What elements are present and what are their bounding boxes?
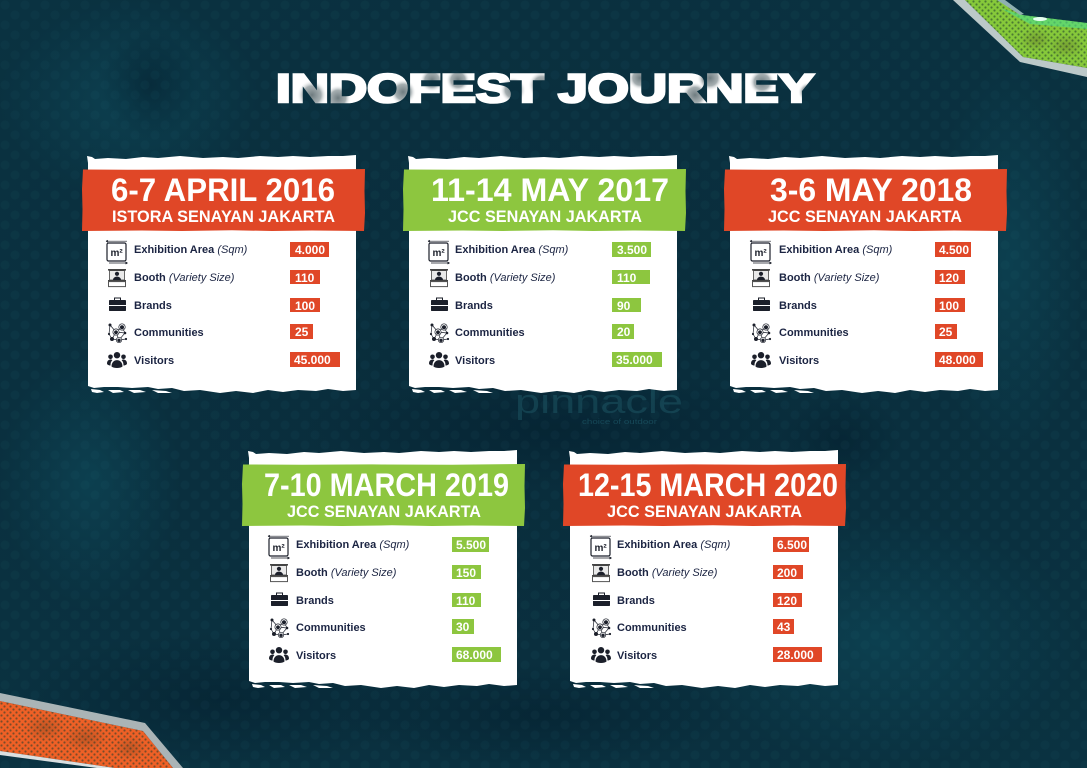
values: 25: [295, 325, 309, 339]
icon: booth: [430, 269, 448, 287]
row labels: Communities: [779, 327, 849, 339]
banner: 2019: JCC SENAYAN JAKARTA: [287, 503, 481, 521]
banner: 2020: JCC SENAYAN JAKARTA: [607, 503, 802, 521]
banner: 2016: ISTORA SENAYAN JAKARTA: [112, 208, 335, 226]
icon: area: m²: [110, 248, 123, 259]
values: 110: [617, 271, 637, 285]
icon: brands: [753, 298, 770, 311]
values: 6.500: [777, 538, 807, 552]
row labels: Brands: [779, 300, 817, 312]
row labels: Exhibition Area (Sqm): [134, 244, 248, 256]
row labels: Communities: [296, 622, 366, 634]
row labels: Brands: [134, 300, 172, 312]
icon: communities: [270, 618, 289, 638]
icon: brands: [431, 298, 448, 311]
banner: 2019: 7-10 MARCH 2019: [264, 467, 509, 503]
values: 68.000: [456, 648, 493, 662]
banner: 2019: [242, 464, 525, 526]
icon: area: [106, 240, 128, 264]
banner: 2017: 11-14 MAY 2017: [431, 172, 669, 208]
icon: visitors: [751, 352, 771, 368]
row labels: Visitors: [617, 650, 657, 662]
values: 45.000: [294, 353, 331, 367]
row labels: Communities: [455, 327, 525, 339]
values: 110: [295, 271, 315, 285]
values: 25: [939, 325, 953, 339]
values: 200: [777, 566, 797, 580]
panel: 2017: [403, 155, 686, 393]
row labels: Communities: [617, 622, 687, 634]
banner: 2018: JCC SENAYAN JAKARTA: [768, 208, 962, 226]
decorative corner: top right green: [953, 0, 1087, 77]
values: 28.000: [777, 648, 814, 662]
icon: booth: [108, 269, 126, 287]
row labels: Brands: [455, 300, 493, 312]
row labels: Booth (Variety Size): [134, 272, 235, 284]
banner: 2017: JCC SENAYAN JAKARTA: [448, 208, 642, 226]
values: [612, 242, 662, 367]
row labels: Booth (Variety Size): [779, 272, 880, 284]
icon: communities: [752, 324, 771, 343]
banner: 2018: 3-6 MAY 2018: [770, 172, 972, 208]
row labels: Exhibition Area (Sqm): [779, 244, 893, 256]
values: 5.500: [456, 538, 486, 552]
icon: visitors: [107, 352, 127, 368]
icon: area: m²: [272, 543, 285, 554]
values: [773, 537, 822, 662]
row labels: Visitors: [296, 650, 336, 662]
panel: 2018: [724, 155, 1007, 393]
row labels: Visitors: [455, 355, 495, 367]
background: pinnacle: [515, 383, 683, 421]
values: 48.000: [939, 353, 976, 367]
icon: communities: [592, 618, 611, 638]
title: INDOFEST JOURNEY: [276, 67, 814, 111]
icon: booth: [270, 564, 288, 582]
row labels: Brands: [296, 595, 334, 607]
panel: 2016: [82, 155, 365, 393]
icon: area: [590, 535, 612, 559]
row labels: Booth (Variety Size): [617, 567, 718, 579]
panel: 2019: [242, 450, 525, 688]
background: choice of outdoor: [582, 419, 658, 426]
values: 90: [617, 299, 631, 313]
banner: 2018: [724, 169, 1007, 231]
icon: visitors: [591, 647, 611, 663]
row labels: [296, 539, 410, 662]
icon: communities: [108, 324, 127, 343]
values: 120: [939, 271, 959, 285]
row labels: Visitors: [779, 355, 819, 367]
values: [452, 537, 501, 662]
row labels: Exhibition Area (Sqm): [455, 244, 569, 256]
banner: 2020: 12-15 MARCH 2020: [578, 467, 838, 503]
row labels: Exhibition Area (Sqm): [617, 539, 731, 551]
decorative corner: bottom left orange: [0, 693, 183, 768]
values: 4.000: [295, 243, 325, 257]
icon: brands: [593, 593, 610, 606]
icon: area: m²: [432, 248, 445, 259]
row labels: [779, 244, 893, 367]
icon: area: m²: [594, 543, 607, 554]
banner: 2016: [82, 169, 365, 231]
values: [290, 242, 340, 367]
values: 30: [456, 620, 470, 634]
values: 110: [456, 594, 476, 608]
values: 20: [617, 325, 631, 339]
icon: visitors: [429, 352, 449, 368]
values: 150: [456, 566, 476, 580]
icon: booth: [752, 269, 770, 287]
row labels: [134, 244, 248, 367]
icon: visitors: [269, 647, 289, 663]
row labels: Exhibition Area (Sqm): [296, 539, 410, 551]
icon: area: [750, 240, 772, 264]
row labels: Communities: [134, 327, 204, 339]
icon: communities: [430, 324, 449, 343]
row labels: Visitors: [134, 355, 174, 367]
icon: brands: [109, 298, 126, 311]
values: 3.500: [617, 243, 647, 257]
values: [935, 242, 983, 367]
icon: area: [428, 240, 450, 264]
values: 35.000: [616, 353, 653, 367]
values: 4.500: [939, 243, 969, 257]
row labels: Booth (Variety Size): [455, 272, 556, 284]
values: 120: [777, 594, 797, 608]
values: 43: [777, 620, 791, 634]
values: 100: [939, 299, 959, 313]
banner: 2020: [563, 464, 846, 526]
icon: area: [268, 535, 290, 559]
row labels: Booth (Variety Size): [296, 567, 397, 579]
panel: 2020: [563, 450, 846, 688]
row labels: [455, 244, 569, 367]
icon: booth: [592, 564, 610, 582]
banner: 2016: 6-7 APRIL 2016: [111, 172, 335, 208]
row labels: [617, 539, 731, 662]
icon: area: m²: [754, 248, 767, 259]
banner: 2017: [403, 169, 686, 231]
row labels: Brands: [617, 595, 655, 607]
icon: brands: [271, 593, 288, 606]
values: 100: [295, 299, 315, 313]
